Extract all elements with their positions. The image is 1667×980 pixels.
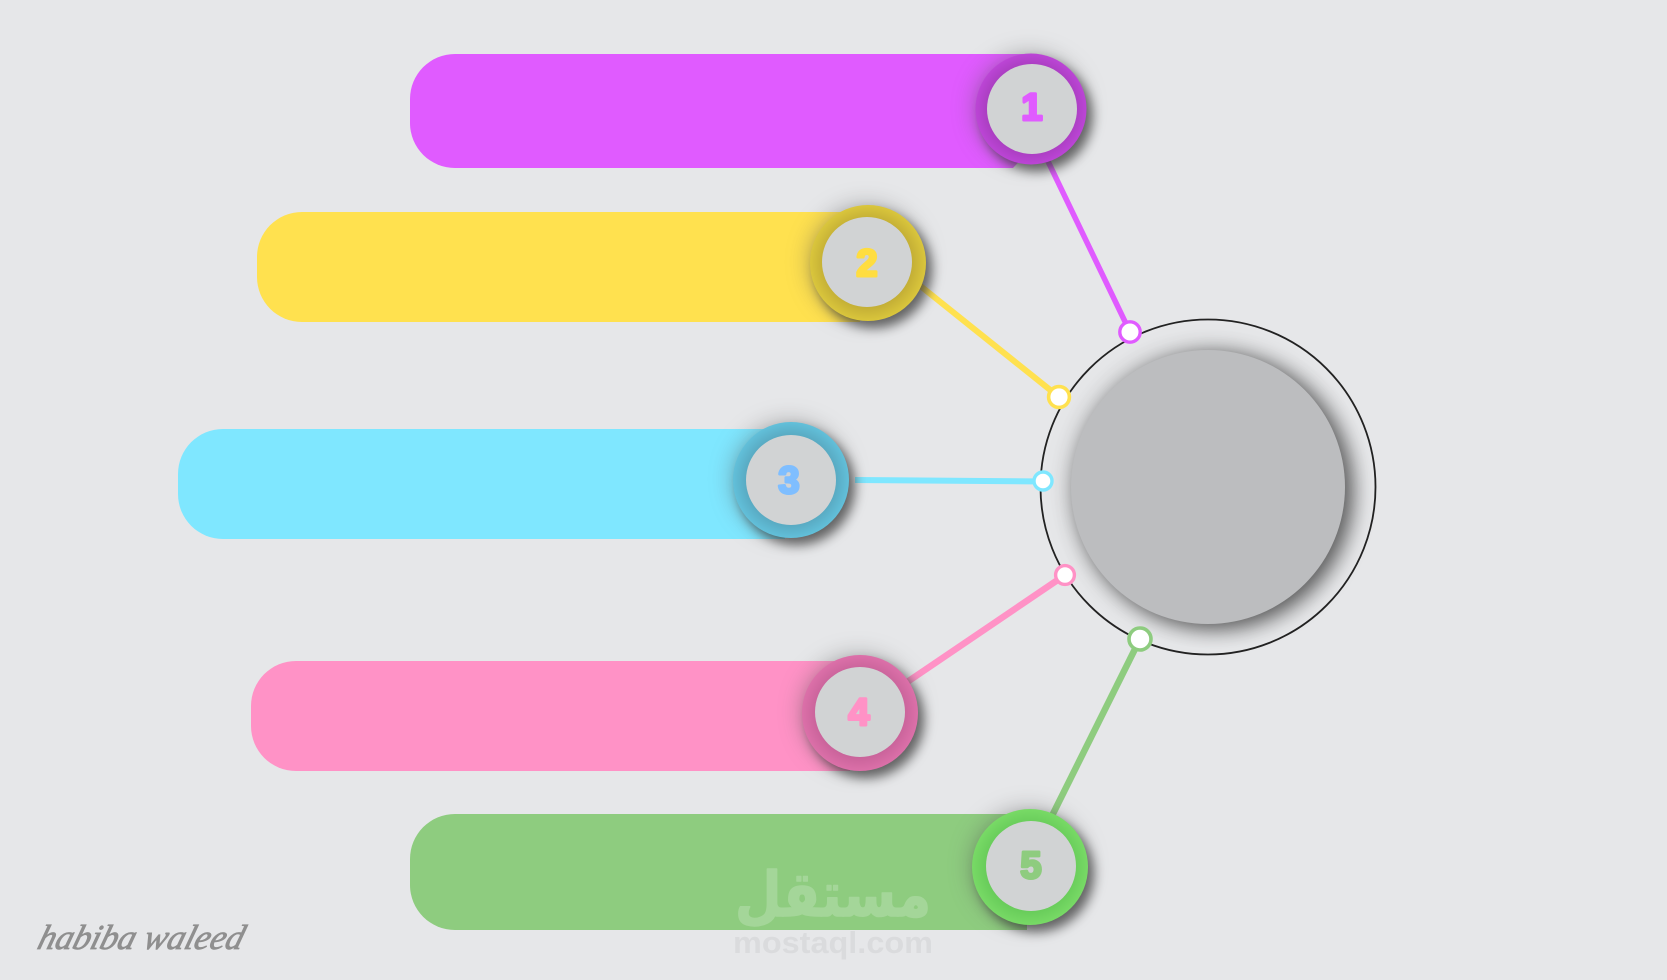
connector dot 2 xyxy=(1049,387,1069,407)
hub outer ring xyxy=(1040,320,1376,654)
hub inner disc xyxy=(1071,350,1345,624)
connector 3 xyxy=(855,480,1043,482)
bar 1 xyxy=(410,54,1030,168)
connector 5 xyxy=(1030,639,1140,860)
central hub xyxy=(1040,320,1376,654)
panel: item 4 pink xyxy=(251,566,1074,771)
panel: item 3 cyan xyxy=(178,422,1052,539)
badge 3 xyxy=(733,422,849,538)
connector 2 xyxy=(868,244,1059,397)
bar 2 xyxy=(257,212,860,322)
connector dot 5 xyxy=(1129,628,1151,650)
panel: item 5 green xyxy=(410,628,1151,930)
panel: item 2 yellow xyxy=(257,205,1069,407)
badge 4: 4 xyxy=(848,692,870,734)
badge 2 xyxy=(810,205,926,321)
badge 1: 1 xyxy=(1021,87,1043,129)
badge 2: 2 xyxy=(856,243,878,285)
badge 5: 5 xyxy=(1020,845,1042,887)
badge 3: 3 xyxy=(778,460,800,502)
badge 4 xyxy=(802,655,918,771)
connector dot 4 xyxy=(1056,566,1074,584)
panel: item 1 magenta xyxy=(410,54,1140,342)
connector 4 xyxy=(860,575,1065,714)
bar 5 xyxy=(410,814,1027,930)
badge 5 xyxy=(972,809,1088,925)
watermark latin: mostaql.com xyxy=(733,925,933,960)
connector dot 1 xyxy=(1120,322,1140,342)
connector 1 xyxy=(1032,128,1130,332)
badge 1 xyxy=(976,54,1086,164)
signature: habiba waleed xyxy=(34,918,250,957)
bar 3 xyxy=(178,429,785,539)
connector dot 3 xyxy=(1034,472,1052,490)
bar 4 xyxy=(251,661,850,771)
watermark xyxy=(733,858,933,960)
watermark arabic: مستقل xyxy=(735,858,931,931)
